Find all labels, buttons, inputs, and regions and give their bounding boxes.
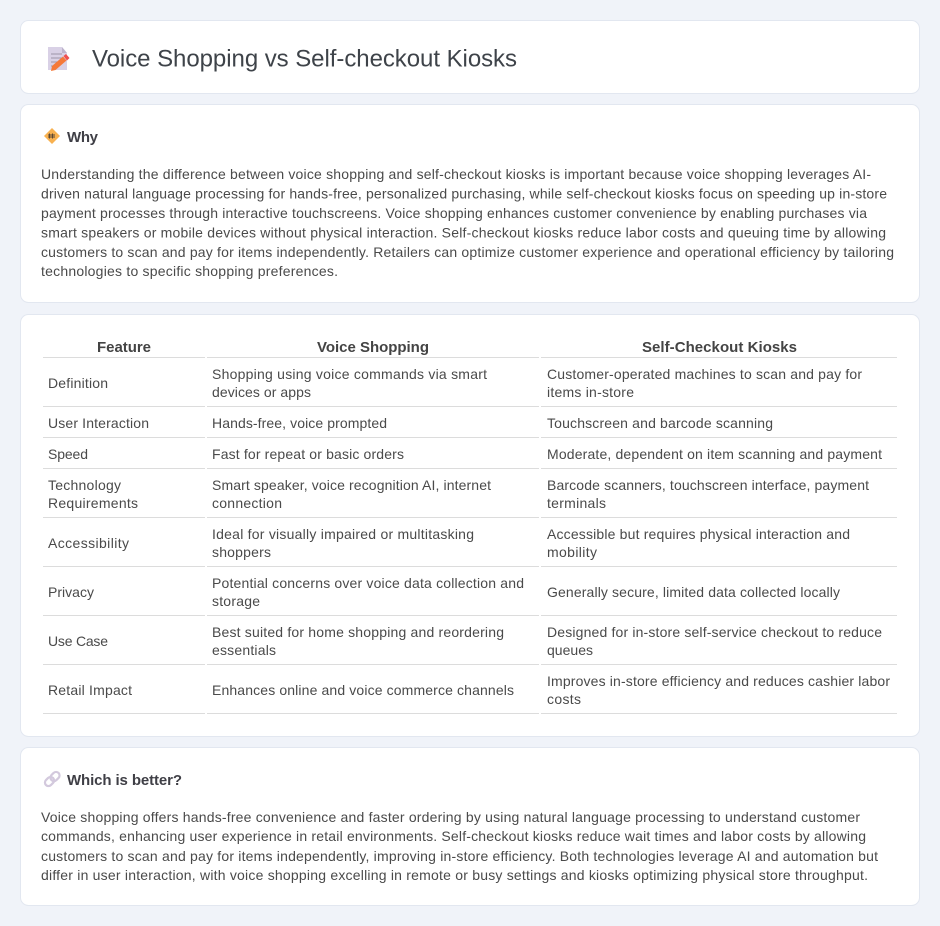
table row: retail impact: Improves in-store efficiency and reduces cashier labor (547, 673, 890, 689)
table row: definition: devices or apps (212, 384, 311, 400)
text block: why paragraph (41, 166, 894, 279)
table row: use case: Use Case (48, 633, 108, 649)
table row: privacy: storage (212, 593, 260, 609)
table row: speed: Fast for repeat or basic orders (212, 446, 404, 462)
text block: why paragraph: payment processes through interactive touchscreens. Voice shopping enhances customer convenience by enabling purchases via (41, 205, 867, 221)
table row: speed (43, 446, 897, 469)
table row: accessibility: Accessibility (48, 535, 129, 551)
table row: use case (43, 624, 897, 665)
icon: memo with pencil (48, 47, 70, 71)
text block: why paragraph: smart speakers or mobile devices without physical interaction. Self-checkout kiosks reduce labor costs and queuing time by allowing (41, 224, 886, 240)
table row: technology requirements: Smart speaker, voice recognition AI, internet (212, 477, 491, 493)
text block: why paragraph: driven natural language processing for hands-free, personalized purchasing, while self-checkout kiosks focus on speeding up in-store (41, 186, 887, 202)
text block: which is better paragraph: customers to scan and pay for items independently, improving in-store efficiency. Both technologies leverage AI and automation but (41, 848, 878, 864)
table row: retail impact: Retail Impact (48, 682, 132, 698)
table row: definition: Customer-operated machines to scan and pay for (547, 366, 862, 382)
table row: user interaction: Hands-free, voice prompted (212, 415, 387, 431)
panel: title header (20, 20, 920, 94)
table row: user interaction: User Interaction (48, 415, 149, 431)
table row: use case: queues (547, 642, 593, 658)
table row: technology requirements: Barcode scanners, touchscreen interface, payment (547, 477, 869, 493)
table row: use case: Designed for in-store self-service checkout to reduce (547, 624, 882, 640)
table row: technology requirements: Technology (48, 477, 121, 493)
table row: user interaction (43, 415, 897, 438)
text block: which is better paragraph: differ in user interaction, with voice shopping excelling in remote or busy settings and kiosks optimizing physical store throughput. (41, 867, 868, 883)
title: Voice Shopping vs Self-checkout Kiosks (92, 46, 517, 72)
table row: retail impact (43, 673, 897, 714)
text block: which is better paragraph (41, 809, 878, 883)
table row: use case: Best suited for home shopping and reordering (212, 624, 504, 640)
table row: privacy (43, 575, 897, 616)
table row: retail impact: costs (547, 691, 581, 707)
table row: technology requirements: connection (212, 495, 282, 511)
table row: technology requirements (43, 477, 897, 518)
text block: which is better paragraph: commands, enhancing user experience in retail environments. Self-checkout kiosks reduce wait times and labor costs by allowing (41, 828, 866, 844)
table row: privacy: Privacy (48, 584, 94, 600)
panel: which is better (20, 748, 920, 906)
table row: definition: Definition (48, 375, 108, 391)
table row: definition (43, 366, 897, 407)
table row: user interaction: Touchscreen and barcode scanning (547, 415, 773, 431)
table header row: Self-Checkout Kiosks (642, 339, 797, 356)
heading: which is better: Which is better? (67, 772, 182, 789)
table row: definition: Shopping using voice commands via smart (212, 366, 487, 382)
icon: chain link (43, 770, 61, 788)
panel: comparison table (20, 314, 920, 736)
table row: privacy: Generally secure, limited data collected locally (547, 584, 840, 600)
table row: accessibility (43, 526, 897, 567)
table row: definition: items in-store (547, 384, 634, 400)
table header row: Voice Shopping (317, 339, 429, 356)
table row: accessibility: Ideal for visually impaired or multitasking (212, 526, 474, 542)
table row: use case: essentials (212, 642, 276, 658)
table row: speed: Moderate, dependent on item scanning and payment (547, 446, 882, 462)
heading: why: Why (67, 129, 99, 146)
table row: retail impact: Enhances online and voice commerce channels (212, 682, 514, 698)
table row: privacy: Potential concerns over voice data collection and (212, 575, 524, 591)
text block: why paragraph: technologies to specific shopping preferences. (41, 263, 338, 279)
table row: accessibility: shoppers (212, 544, 271, 560)
table header row: Feature (97, 339, 151, 356)
text block: which is better paragraph: Voice shopping offers hands-free convenience and faster ordering by using natural language processing to understand customer (41, 809, 860, 825)
panel: why (20, 104, 920, 302)
table row: speed: Speed (48, 446, 88, 462)
table header row (43, 339, 897, 358)
text block: why paragraph: customers to scan and pay for items independently. Retailers can optimize customer experience and operational efficiency by tailoring (41, 244, 894, 260)
table row: accessibility: Accessible but requires physical interaction and (547, 526, 850, 542)
table row: accessibility: mobility (547, 544, 597, 560)
icon: orange diamond sign (44, 128, 60, 144)
table row: technology requirements: terminals (547, 495, 606, 511)
table row: technology requirements: Requirements (48, 495, 138, 511)
text block: why paragraph: Understanding the difference between voice shopping and self-checkout kiosks is important because voice shopping leverages AI- (41, 166, 871, 182)
